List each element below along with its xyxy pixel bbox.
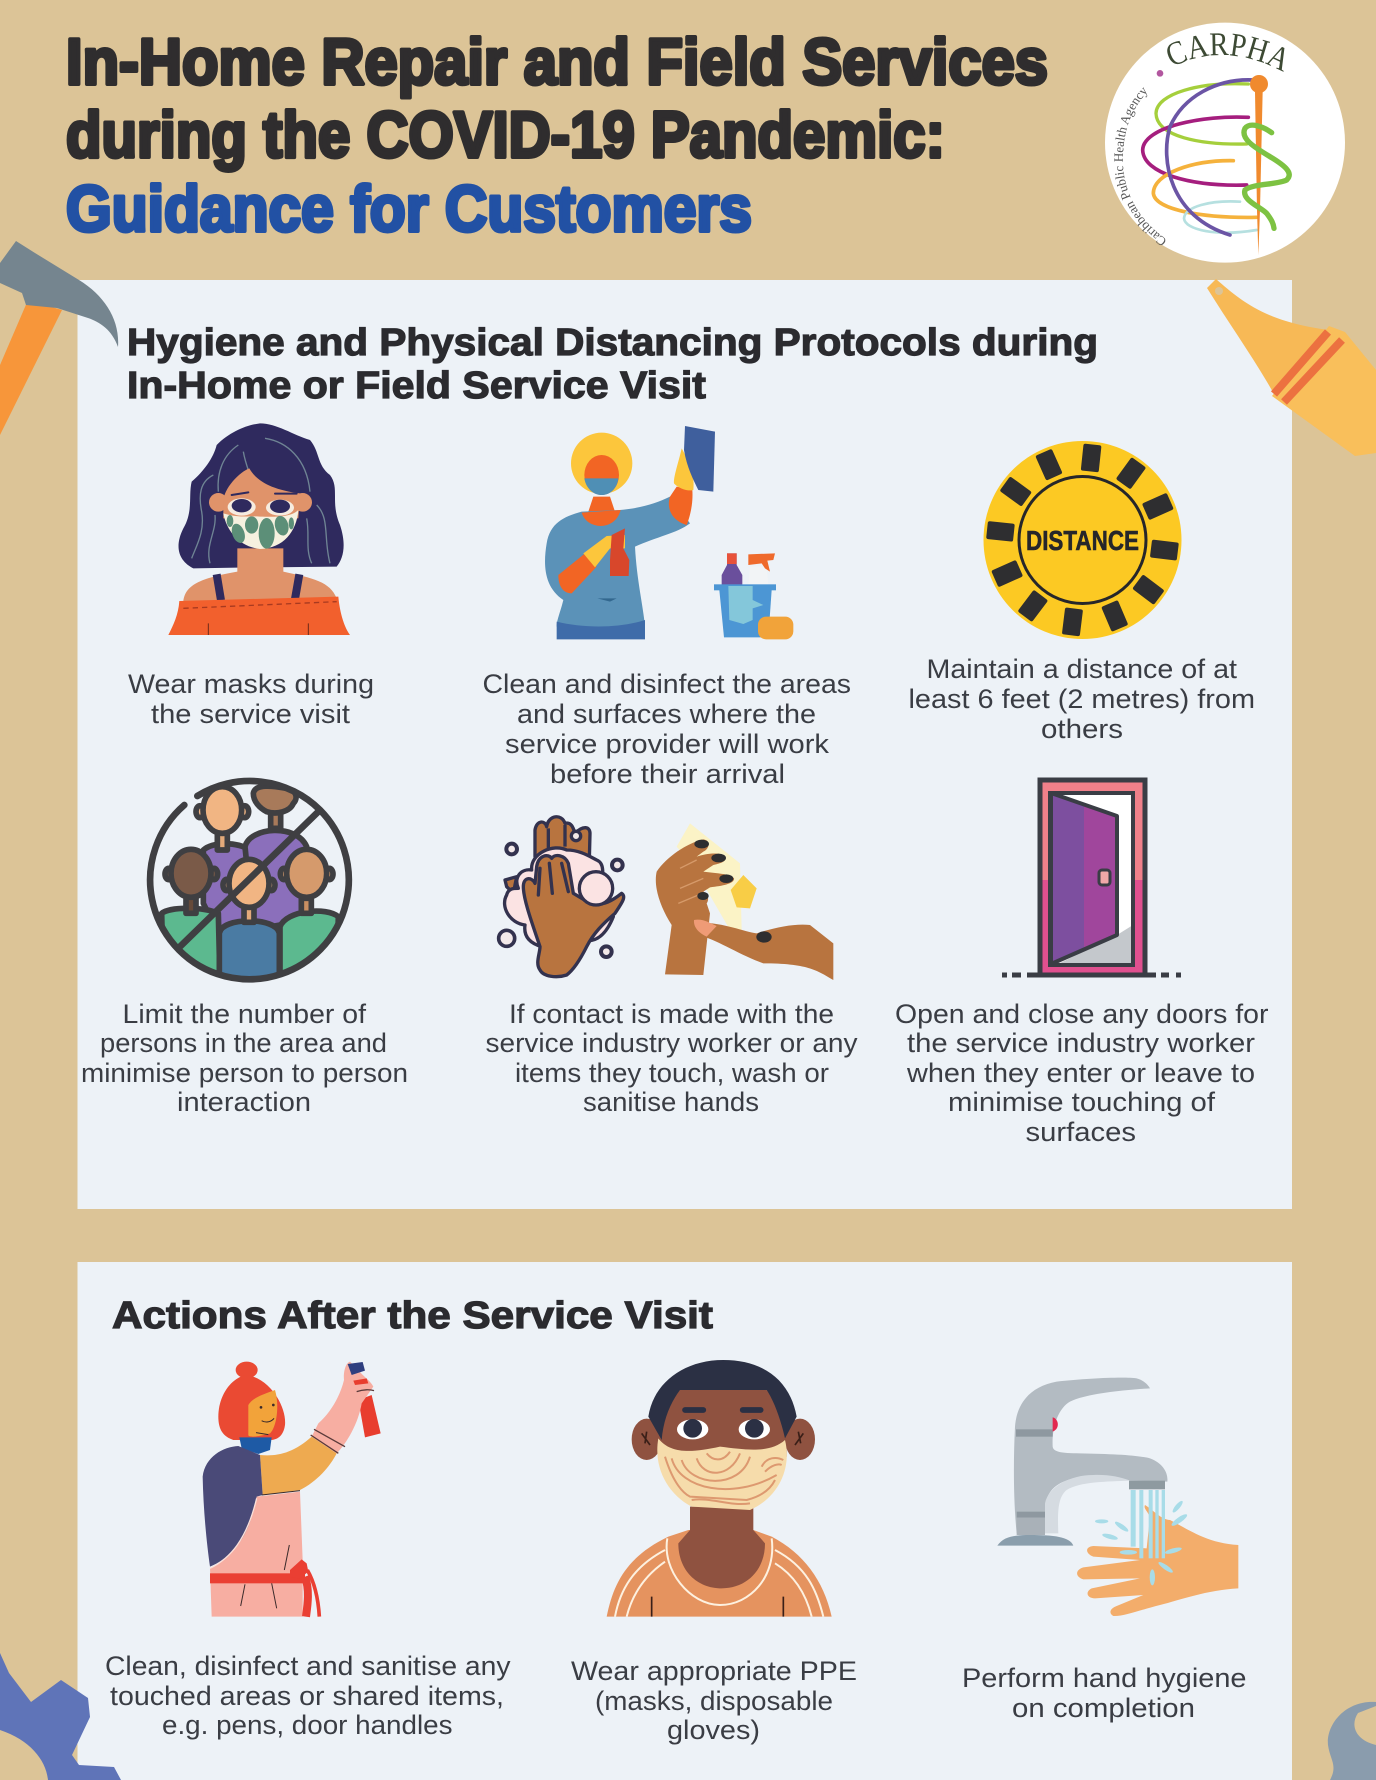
logo: CARPHA [1105, 22, 1345, 263]
title: Guidance for Customers [66, 172, 752, 245]
text: perform hand hygiene [962, 1663, 1246, 1723]
text: limit the number: minimise person to person [81, 1058, 408, 1088]
text: wear masks: the service visit [151, 699, 351, 729]
text: clean and disinfect: and surfaces where the [517, 699, 816, 729]
text: clean and disinfect: Clean and disinfect the areas [482, 669, 851, 699]
text: perform hand hygiene: Perform hand hygiene [962, 1663, 1246, 1693]
heading: hygiene protocols: In-Home or Field Service Visit [127, 365, 706, 407]
heading: actions after the service visit: Actions After the Service Visit [112, 1295, 713, 1337]
icon: woman wearing mask [168, 423, 350, 635]
title [66, 25, 1048, 245]
text: clean and disinfect: service provider will work [505, 729, 830, 759]
icon: crowd of people crossed out [150, 781, 349, 983]
heading: hygiene protocols: Hygiene and Physical Distancing Protocols during [127, 322, 1098, 364]
logo: CARPHA: CARPHA [1167, 33, 1284, 72]
text: if contact is made: items they touch, wash or [515, 1058, 829, 1088]
text: if contact is made: sanitise hands [583, 1087, 759, 1117]
text: limit the number: interaction [177, 1087, 311, 1117]
text: clean disinfect sanitise: Clean, disinfect and sanitise any [105, 1651, 511, 1681]
text: maintain a distance: least 6 feet (2 metres) from [908, 684, 1255, 714]
text: perform hand hygiene: on completion [1012, 1693, 1195, 1723]
icon: washing and sanitising hands [499, 817, 833, 980]
icon: distance floor sign [984, 441, 1182, 639]
title: during the COVID-19 Pandemic: [66, 98, 945, 171]
icon: woman spraying disinfectant [203, 1362, 381, 1617]
text: if contact is made [486, 999, 858, 1117]
text: wear appropriate PPE: (masks, disposable [595, 1686, 833, 1716]
text: limit the number: persons in the area and [100, 1028, 387, 1058]
text: wear appropriate PPE: Wear appropriate PPE [571, 1656, 857, 1686]
text: open and close doors: minimise touching of [948, 1087, 1216, 1117]
text: limit the number [81, 999, 408, 1117]
icon: wrench [1328, 1702, 1376, 1780]
icon: boy wearing mask [607, 1360, 832, 1617]
text: clean and disinfect: before their arrival [550, 759, 785, 789]
icon: faucet and hand washing [997, 1378, 1238, 1616]
text: maintain a distance: others [1041, 714, 1123, 744]
panel: hygiene and physical distancing protocols [78, 280, 1292, 1209]
icon: door [1002, 780, 1181, 975]
text: clean and disinfect [482, 669, 851, 789]
icon: person cleaning with spray and cloth [545, 426, 793, 639]
text: if contact is made: If contact is made with the [509, 999, 834, 1029]
text: clean disinfect sanitise: e.g. pens, door handles [162, 1710, 452, 1740]
text: wear masks [128, 669, 374, 729]
text: wear appropriate PPE: gloves) [667, 1715, 760, 1745]
text: wear appropriate PPE [571, 1656, 857, 1745]
text: clean disinfect sanitise: touched areas or shared items, [110, 1681, 504, 1711]
text: open and close doors [895, 999, 1269, 1147]
icon: gear [0, 1653, 121, 1780]
text: open and close doors: Open and close any doors for [895, 999, 1269, 1029]
text: wear masks: Wear masks during [128, 669, 374, 699]
text: if contact is made: service industry worker or any [486, 1028, 858, 1058]
icon: distance floor sign: DISTANCE [1026, 525, 1139, 556]
text: clean disinfect sanitise [105, 1651, 511, 1740]
heading: hygiene protocols [127, 322, 1098, 407]
text: open and close doors: when they enter or leave to [906, 1058, 1255, 1088]
text: limit the number: Limit the number of [122, 999, 367, 1029]
title: In-Home Repair and Field Services [66, 25, 1048, 98]
text: open and close doors: the service industry worker [907, 1028, 1255, 1058]
icon: hammer [0, 241, 118, 435]
text: maintain a distance: Maintain a distance of at [926, 654, 1238, 684]
logo: CARPHA: Caribbean Public Health Agency [1114, 87, 1166, 246]
icon: paint brush [1207, 279, 1376, 456]
panel: actions after the service visit [78, 1262, 1292, 1780]
text: open and close doors: surfaces [1026, 1117, 1136, 1147]
text: maintain a distance [908, 654, 1255, 744]
